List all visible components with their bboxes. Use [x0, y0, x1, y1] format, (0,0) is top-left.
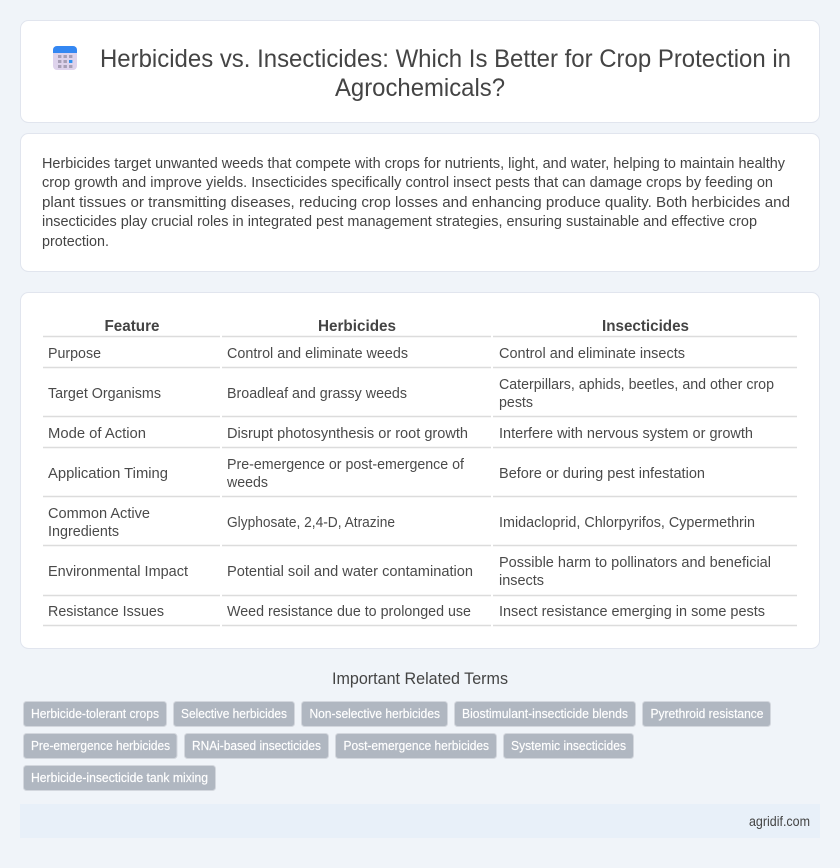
row: environmental impact: [48, 555, 771, 589]
related term chips: [24, 702, 770, 790]
row: common active ingredients: Ingredients: [48, 524, 119, 540]
intro paragraph: crop growth and improve yields. Insecticides specifically control insect pests that can damage crops by feeding on: [42, 174, 773, 191]
panel: title card: [20, 20, 820, 122]
row: target organisms: Target Organisms: [48, 386, 161, 402]
row: application timing: [48, 457, 705, 491]
row: purpose: [48, 346, 685, 362]
table header: Feature: [104, 318, 160, 335]
row: common active ingredients: [48, 506, 755, 540]
row: common active ingredients: Imidacloprid, Chlorpyrifos, Cypermethrin: [499, 515, 755, 531]
row: application timing: Pre-emergence or post-emergence of: [227, 457, 465, 473]
footer bar: [20, 804, 820, 838]
row: target organisms: Caterpillars, aphids, beetles, and other crop: [499, 377, 774, 393]
intro paragraph: Herbicides target unwanted weeds that compete with crops for nutrients, light, and water, helping to maintain healthy: [42, 155, 785, 172]
table header: Insecticides: [602, 318, 689, 335]
row: mode of action: [48, 426, 753, 442]
title: Herbicides vs. Insecticides: Which Is Better for Crop Protection in: [100, 45, 791, 73]
row: common active ingredients: Common Active: [48, 506, 150, 522]
row: environmental impact: Potential soil and water contamination: [227, 564, 473, 580]
row: purpose: Control and eliminate insects: [499, 346, 685, 362]
row: application timing: Application Timing: [48, 466, 168, 482]
row: environmental impact: insects: [499, 573, 544, 589]
row: mode of action: Interfere with nervous system or growth: [499, 426, 753, 442]
related term chips: Non-selective herbicides: [310, 707, 440, 721]
row: common active ingredients: Glyphosate, 2,4-D, Atrazine: [227, 515, 395, 531]
row: environmental impact: Possible harm to pollinators and beneficial: [499, 555, 771, 571]
related term chips: Pre-emergence herbicides: [31, 739, 170, 753]
title: Agrochemicals?: [335, 74, 505, 102]
related term chips: Systemic insecticides: [511, 739, 626, 753]
intro paragraph: [42, 155, 790, 250]
related term chips: Pyrethroid resistance: [650, 707, 764, 721]
row: resistance issues: Weed resistance due to prolonged use: [227, 604, 471, 620]
related term chips: Selective herbicides: [181, 707, 287, 721]
row: purpose: Purpose: [48, 346, 101, 362]
row: target organisms: pests: [499, 395, 533, 411]
row: purpose: Control and eliminate weeds: [227, 346, 408, 362]
table header: [104, 318, 689, 335]
related term chips: RNAi-based insecticides: [192, 739, 321, 753]
panel: comparison table: [20, 292, 820, 648]
related term chips: Herbicide-tolerant crops: [31, 707, 159, 721]
footer bar: agridif.com: [749, 814, 810, 829]
row: resistance issues: Insect resistance emerging in some pests: [499, 604, 765, 620]
row: target organisms: Broadleaf and grassy weeds: [227, 386, 407, 402]
row: application timing: Before or during pest infestation: [499, 466, 705, 482]
intro paragraph: insecticides play crucial roles in integrated pest management strategies, ensuring sustainable and effective crop: [42, 213, 757, 230]
intro paragraph: plant tissues or transmitting diseases, reducing crop losses and enhancing produce quality. Both herbicides and: [42, 194, 790, 211]
panel: intro text: [20, 134, 820, 272]
row: mode of action: Mode of Action: [48, 426, 146, 442]
row: environmental impact: Environmental Impact: [48, 564, 188, 580]
row: resistance issues: [48, 604, 765, 620]
title: [100, 45, 791, 102]
row: resistance issues: Resistance Issues: [48, 604, 164, 620]
row: mode of action: Disrupt photosynthesis or root growth: [227, 426, 468, 442]
related term chips: Post-emergence herbicides: [344, 739, 489, 753]
icon: calendar: [53, 46, 77, 70]
intro paragraph: protection.: [42, 233, 109, 250]
related term chips: Biostimulant-insecticide blends: [462, 707, 628, 721]
row: application timing: weeds: [226, 475, 268, 491]
row: target organisms: [48, 377, 774, 411]
heading: related terms: Important Related Terms: [332, 669, 508, 688]
table header: Herbicides: [318, 318, 396, 335]
related term chips: Herbicide-insecticide tank mixing: [31, 771, 208, 785]
